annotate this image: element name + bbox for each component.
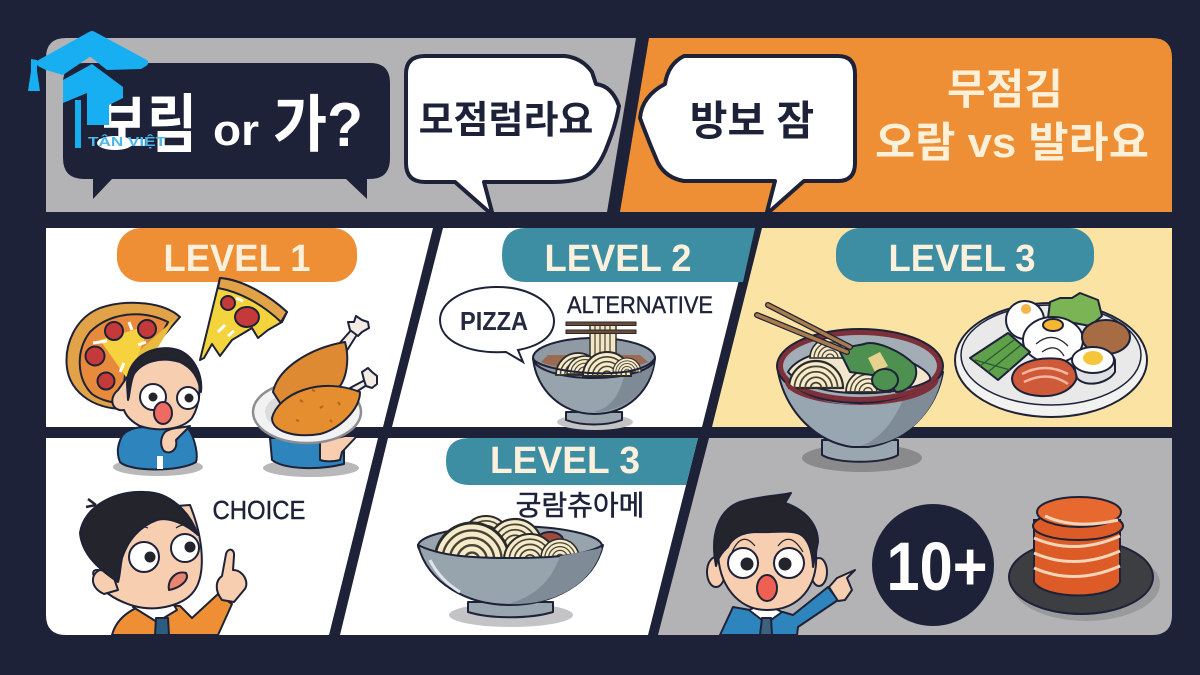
badge: level 1: LEVEL 1 <box>164 238 310 280</box>
white speech bubble: 방보 잠 <box>640 56 855 212</box>
logo: Tan Viet graduation cap: TÂN VIỆT <box>88 134 166 149</box>
panel: level 1 <box>46 228 433 427</box>
white speech bubble: 방보 잠: 방보 잠 <box>690 98 814 144</box>
character: thinking man <box>112 348 203 476</box>
white speech bubble: 모점럼라요: 모점럼라요 <box>419 100 593 142</box>
panel: top left grey header <box>46 38 636 212</box>
illustration: whole pizza <box>67 303 180 409</box>
dark speech bubble title <box>63 63 390 199</box>
badge: level 3 top <box>836 228 1094 282</box>
badge: 10+: 10+ <box>886 528 988 605</box>
label: 궁람츄아메: 궁람츄아메 <box>516 490 644 521</box>
badge: level 3 lower: LEVEL 3 <box>490 440 640 482</box>
badge: level 1 <box>117 228 357 282</box>
illustration: pizza slice <box>200 278 287 360</box>
speech bubble: PIZZA <box>440 287 554 362</box>
panel: top right orange header <box>620 38 1172 212</box>
badge: level 3 top: LEVEL 3 <box>888 238 1036 280</box>
dark speech bubble title: 보림 <box>97 89 197 161</box>
badge: level 3 lower <box>446 438 698 485</box>
label: CHOICE: CHOICE <box>212 495 306 525</box>
heading: orange panel text: 오람 vs 발라요 <box>875 119 1149 166</box>
dark speech bubble title: 가? <box>273 91 363 160</box>
white speech bubble: 모점럼라요 <box>406 56 619 212</box>
illustration: plate with rice, egg and kimchi <box>955 293 1147 417</box>
label: ALTERNATIVE: ALTERNATIVE <box>567 292 713 319</box>
badge: 10+ <box>872 504 994 626</box>
badge: level 2 <box>502 228 755 282</box>
illustration: large noodle bowl in grey dish <box>418 516 603 627</box>
heading: orange panel text: 무점김 <box>947 66 1063 113</box>
panel: level 2 <box>392 228 752 427</box>
illustration: fried chicken on plate <box>253 316 377 477</box>
character: surprised man pointing <box>707 493 855 635</box>
badge: level 2: LEVEL 2 <box>544 238 692 280</box>
logo: Tan Viet graduation cap <box>28 31 166 150</box>
illustration: ramen bowl with chopsticks <box>757 305 943 472</box>
panel: level 3 noodles <box>340 438 698 635</box>
panel: choice <box>46 438 378 635</box>
illustration: stacked kimchi pancakes <box>1009 497 1160 621</box>
panel: level 3 yellow <box>712 228 1172 427</box>
panel: 10+ grey <box>658 438 1172 635</box>
heading: orange panel text <box>875 66 1149 166</box>
dark speech bubble title: or <box>213 106 259 155</box>
speech bubble: PIZZA: PIZZA <box>460 306 528 336</box>
illustration: small noodle bowl <box>533 322 655 430</box>
character: man with raised finger <box>80 492 246 635</box>
